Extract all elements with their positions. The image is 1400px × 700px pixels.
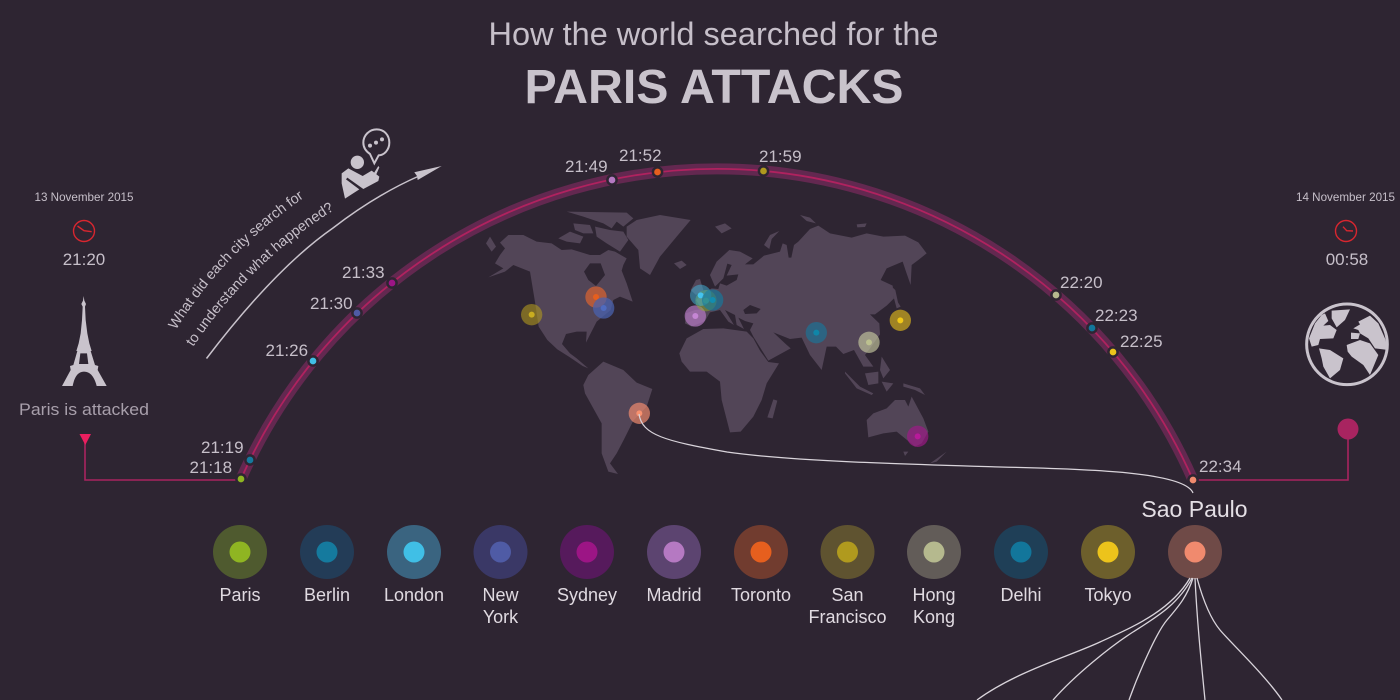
marker: new york: [593, 297, 614, 319]
left connector: [80, 434, 241, 480]
marker: delhi: [806, 322, 827, 343]
legend: sao paulo: [1168, 525, 1222, 579]
time labels: 22:34: [1199, 457, 1242, 476]
arctic russian islands: [715, 215, 867, 249]
dot: 21:26 london: [308, 356, 318, 366]
africa: [679, 328, 779, 432]
marker: tokyo: [890, 310, 911, 331]
legend: london: London: [384, 585, 444, 605]
label: paris is attacked: Paris is attacked: [19, 400, 149, 419]
right connector: [1193, 418, 1358, 480]
dot: 22:23 delhi: [1087, 323, 1097, 333]
legend: toronto: [731, 525, 791, 605]
time labels: 21:19: [201, 438, 244, 457]
legend: madrid: Madrid: [646, 585, 702, 605]
marker: london: [690, 285, 711, 306]
title: PARIS ATTACKS: [524, 61, 904, 114]
legend: san francisco: Francisco: [808, 607, 887, 627]
right block: end date: 00:58: [1326, 250, 1368, 269]
legend: delhi: [994, 525, 1048, 605]
marker: toronto: [585, 286, 607, 308]
legend: new york: New: [482, 585, 520, 605]
legend: hong kong: Kong: [913, 607, 955, 627]
right block: end date: 14 November 2015: [1296, 190, 1395, 204]
time labels: 21:59: [759, 147, 802, 166]
marker: paris: [695, 290, 717, 311]
dot: 21:19 berlin: [245, 455, 255, 465]
legend: tokyo: [1081, 525, 1135, 605]
timeline dots: [236, 166, 1198, 485]
world map: [486, 212, 952, 474]
legend: san francisco: San: [831, 585, 864, 605]
cities on map: [521, 285, 928, 447]
timeline arc: [241, 169, 1193, 480]
time labels: 21:49: [565, 157, 608, 176]
dot: 21:59 san francisco: [759, 166, 768, 176]
legend: san francisco: [808, 525, 887, 627]
southeast asia and oceania: [845, 357, 952, 463]
marker: hong kong: [858, 332, 880, 353]
dot: 21:18 paris: [236, 474, 246, 484]
legend: berlin: Berlin: [304, 585, 350, 605]
britain: [691, 279, 703, 295]
dot: 21:49 madrid: [607, 175, 617, 185]
marker: sydney: [907, 426, 928, 447]
marker: san francisco: [521, 304, 542, 325]
marker: sao paulo: [629, 403, 650, 424]
legend: tokyo: Tokyo: [1084, 585, 1132, 605]
dot: 22:25 tokyo: [1108, 347, 1118, 357]
legend: sydney: [557, 525, 617, 605]
legend: hong kong: [907, 525, 961, 627]
icon: clock left: [74, 220, 94, 242]
legend: hong kong: Hong: [912, 585, 956, 605]
time labels: 22:23: [1095, 306, 1138, 325]
dot: 22:34 sao paulo: [1188, 475, 1198, 485]
left block: start date: [34, 190, 134, 269]
dot: 21:33 sydney: [387, 278, 397, 288]
legend: new york: [474, 525, 528, 627]
marker: berlin: [702, 289, 723, 311]
right block: end date: [1296, 190, 1395, 269]
time labels: 22:20: [1060, 273, 1103, 292]
time labels: 21:52: [619, 146, 662, 165]
arrow: [206, 166, 442, 358]
legend: paris: [213, 525, 267, 605]
time labels: 21:26: [266, 341, 308, 360]
time labels: [190, 146, 1242, 477]
legend: toronto: Toronto: [731, 585, 791, 605]
hudson bay: [584, 263, 605, 286]
icon: globe: [1307, 304, 1388, 385]
madagascar: [767, 399, 777, 418]
dot: 22:20 hong kong: [1051, 290, 1061, 300]
eurasia: [674, 215, 927, 370]
north america and arctic: [486, 212, 691, 368]
time labels: 21:33: [342, 263, 385, 282]
time labels: 21:30: [310, 294, 353, 313]
title: How the world searched for the: [488, 16, 938, 52]
flow lines to below: [977, 578, 1282, 700]
sao paulo connector: [639, 414, 1193, 493]
marker: madrid: [685, 305, 706, 327]
icon: eiffel tower: [62, 296, 107, 386]
legend: sydney: Sydney: [557, 585, 617, 605]
question text: to understand what happened?: [186, 202, 332, 346]
legend: delhi: Delhi: [1000, 585, 1042, 605]
japan: [892, 287, 901, 308]
legend: [213, 525, 1222, 627]
time labels: 22:25: [1120, 332, 1163, 351]
icon: person with speech bubble: [342, 129, 389, 199]
question text: What did each city search for: [168, 192, 302, 328]
left block: start date: 21:20: [63, 250, 105, 269]
dot: 21:30 new york: [352, 308, 362, 318]
left block: start date: 13 November 2015: [34, 190, 134, 204]
greenland: [627, 215, 691, 275]
iceland: [674, 261, 687, 269]
legend: new york: York: [483, 607, 519, 627]
legend: madrid: [646, 525, 702, 605]
black sea: [743, 305, 761, 314]
dot: 21:52 toronto: [653, 167, 662, 177]
legend: london: [384, 525, 444, 605]
legend: berlin: [300, 525, 354, 605]
south america: [583, 362, 652, 474]
title: [488, 16, 938, 114]
legend: paris: Paris: [219, 585, 261, 605]
icon: clock right: [1336, 220, 1356, 242]
label: sao paulo: Sao Paulo: [1141, 496, 1248, 522]
time labels: 21:18: [190, 458, 232, 477]
